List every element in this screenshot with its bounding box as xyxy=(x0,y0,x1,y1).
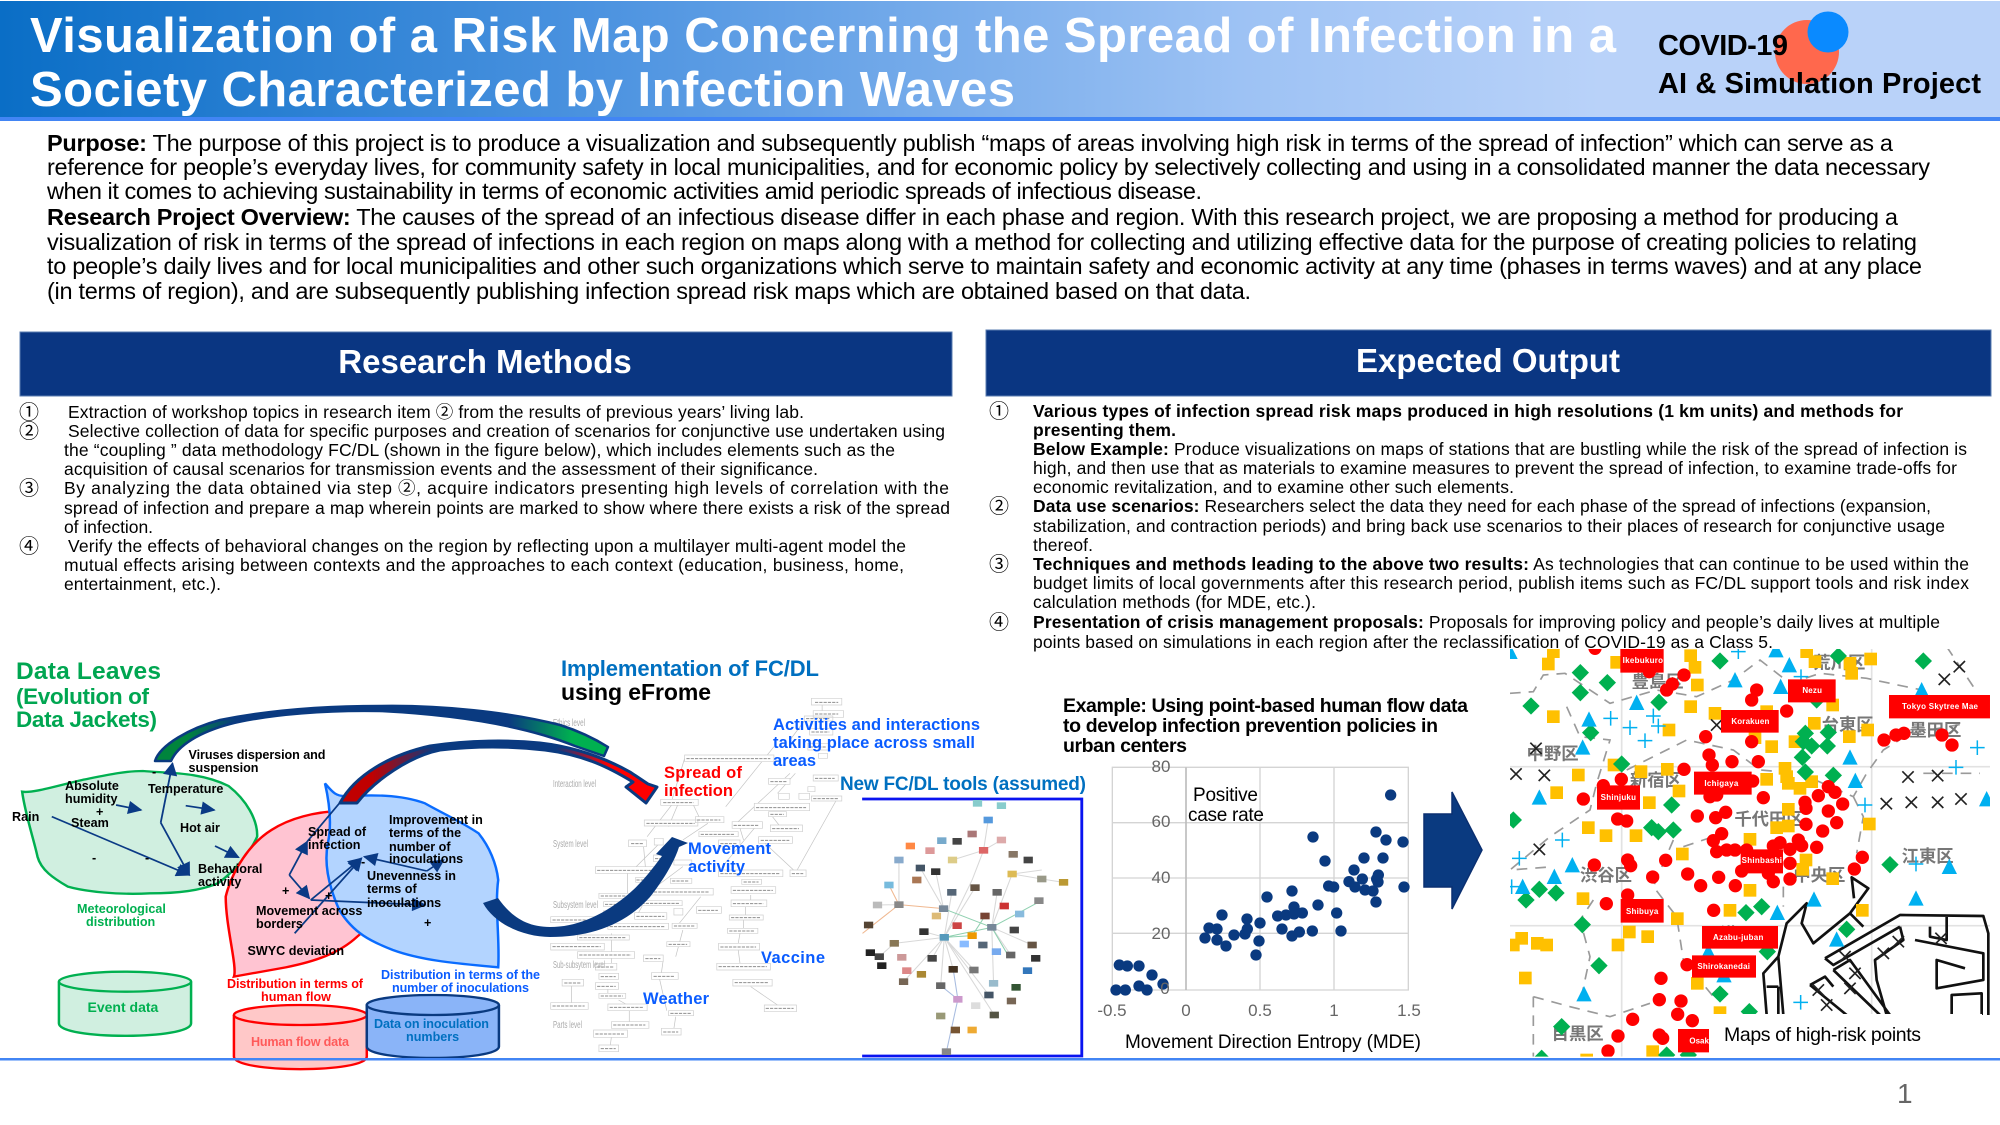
data leaves labels: Hot air xyxy=(180,821,220,835)
research methods list: By analyzing the data obtained via step ②, acquire indicators presenting high levels of correlation with the xyxy=(64,478,949,498)
expected output list: ④ xyxy=(989,606,1009,635)
map caption: Maps of high-risk points xyxy=(1724,1024,1921,1046)
ward names: 目黒区 xyxy=(1552,1019,1604,1044)
data leaves labels: suspension xyxy=(188,761,258,775)
leaf and cylinder captions: human flow xyxy=(261,990,331,1004)
axis tick labels: 80 xyxy=(1152,757,1170,776)
data leaves labels: number of xyxy=(389,840,451,854)
eFrome topic labels: areas xyxy=(773,752,816,770)
title xyxy=(30,9,1617,117)
data leaves labels: Rain xyxy=(12,810,39,824)
expected output list: calculation methods (for MDE, etc.). xyxy=(1033,592,1316,612)
data leaves labels: + xyxy=(424,916,431,930)
panel heading: research methods: Research Methods xyxy=(338,343,632,380)
title: Visualization of a Risk Map Concerning the Spread of Infection in a xyxy=(30,9,1617,63)
ward names: 墨田区 xyxy=(1909,716,1961,741)
data leaves heading: (Evolution of xyxy=(16,684,150,709)
eFrome topic labels: Weather xyxy=(643,990,710,1008)
leaf and cylinder captions: Data on inoculation xyxy=(374,1017,489,1031)
data leaves labels: + xyxy=(96,805,103,819)
data leaves labels: humidity xyxy=(65,792,117,806)
station labels: Shirokanedai xyxy=(1697,962,1750,971)
block arrow to map xyxy=(1424,792,1482,909)
eFrome topic labels: infection xyxy=(664,782,733,800)
research methods list: mutual effects arising between contexts and the approaches to each context (education, business, home, xyxy=(64,555,904,575)
data leaves labels: Steam xyxy=(71,816,109,830)
plus markers xyxy=(1504,644,1985,1010)
level labels: Interaction level xyxy=(553,778,596,790)
axis titles: Movement Direction Entropy (MDE) xyxy=(1125,1032,1421,1053)
risk map xyxy=(1502,642,1994,1067)
expected output list: ② xyxy=(989,490,1009,519)
purpose and overview text: visualization of risk in terms of the spread of infections in each region on maps along with a method for collecting and utilizing effective data for the purpose of creating policies to relating xyxy=(47,229,1917,255)
purpose and overview text: when it comes to achieving sustainability in terms of economic activities amid periodic spreads of infectious disease. xyxy=(46,178,1202,204)
level labels: System level xyxy=(553,838,588,850)
research methods list: ② xyxy=(19,415,39,444)
curved arrow: red into eFrome xyxy=(340,741,657,803)
station labels: Ikebukuro xyxy=(1623,656,1663,665)
data leaves heading: Data Leaves xyxy=(16,658,161,685)
research methods list: acquisition of causal scenarios for transmission events and the assessment of their significance. xyxy=(64,459,818,479)
axis tick labels: 60 xyxy=(1152,812,1170,831)
ward names: 新宿区 xyxy=(1630,766,1682,791)
research methods list xyxy=(19,396,950,594)
leaf and cylinder captions: Distribution in terms of xyxy=(227,977,364,991)
station labels: Nezu xyxy=(1802,686,1822,695)
level labels: Parts level xyxy=(553,1019,582,1031)
ward names: 港区 xyxy=(1720,920,1755,945)
ward names: 渋谷区 xyxy=(1580,861,1632,886)
implementation heading xyxy=(561,656,819,705)
leaf and cylinder captions: Distribution in terms of the xyxy=(381,968,540,982)
axis titles xyxy=(1125,785,1421,1053)
expected output list: budget limits of local governments after this research period, publish items such as FC/DL support tools and risk index xyxy=(1033,573,1969,593)
panel heading: research methods xyxy=(20,332,952,396)
ward names: 荒川区 xyxy=(1813,648,1865,673)
cylinder: human flow data xyxy=(234,1005,367,1069)
research methods list: ① xyxy=(19,396,39,425)
axis tick labels: 1.5 xyxy=(1397,1001,1421,1020)
ward boundaries xyxy=(1510,647,1980,1057)
ward names xyxy=(1527,648,1961,1044)
project logo: COVID-19 xyxy=(1658,30,1788,62)
axis titles: Positive xyxy=(1193,785,1258,806)
example heading: Example: Using point-based human flow data xyxy=(1063,695,1468,717)
station labels: Shinjuku xyxy=(1601,793,1636,802)
scatter chart xyxy=(1097,757,1421,1053)
data leaves labels: terms of xyxy=(367,882,417,896)
expected output list: economic revitalization, and to examine other such elements. xyxy=(1033,477,1514,497)
panel heading: expected output xyxy=(986,330,1991,396)
data leaves labels: Spread of xyxy=(308,825,367,839)
new FC/DL tools heading: New FC/DL tools (assumed) xyxy=(840,774,1086,795)
expected output list: ③ xyxy=(989,548,1009,577)
data leaves labels: activity xyxy=(198,875,241,889)
eFrome topic labels: Movement xyxy=(688,840,772,858)
expected output list xyxy=(989,395,1969,652)
leaf and cylinder captions: Meteorological xyxy=(77,902,166,916)
data leaves labels: - xyxy=(152,765,156,779)
leaf and cylinder captions xyxy=(77,902,540,1049)
ward names: 千代田区 xyxy=(1734,805,1804,830)
data points xyxy=(1110,789,1410,996)
research methods list: Extraction of workshop topics in research item ② from the results of previous years’ living lab. xyxy=(68,402,804,422)
purpose and overview text: Purpose: The purpose of this project is to produce a visualization and subsequently publish “maps of areas involving high risk in terms of the spread of infection” which can serve as a xyxy=(47,130,1894,156)
curved arrow: navy to movement activity xyxy=(483,837,688,937)
axis titles: case rate xyxy=(1188,805,1264,826)
ward names: 中央区 xyxy=(1793,861,1845,886)
implementation heading: Implementation of FC/DL xyxy=(561,656,819,681)
research methods list: ④ xyxy=(19,530,39,559)
expected output list: points based on simulations in each region after the reclassification of COVID-19 as a Class 5. xyxy=(1033,632,1773,652)
data leaves labels: inoculations xyxy=(389,852,463,866)
data leaves heading: Data Jackets) xyxy=(16,707,157,732)
data leaves labels: infection xyxy=(308,838,360,852)
data leaves labels: Viruses dispersion and xyxy=(188,748,326,762)
eFrome topic labels: activity xyxy=(688,858,746,876)
cylinder: event data xyxy=(59,972,191,1036)
expected output list: presenting them. xyxy=(1033,420,1176,440)
implementation heading: using eFrome xyxy=(561,679,711,705)
purpose and overview text: to people’s daily lives and for local municipalities and other such organizations which serve to maintain safety and economic activity at any time (phases in terms waves) and at any place xyxy=(47,253,1922,279)
research methods list: Verify the effects of behavioral changes on the region by reflecting upon a multilayer multi-agent model the xyxy=(68,536,906,556)
station labels: Azabu-juban xyxy=(1713,933,1763,942)
page number: 1 xyxy=(1897,1078,1913,1109)
axis tick labels: 1 xyxy=(1329,1001,1339,1020)
eFrome topic labels: Vaccine xyxy=(761,949,825,967)
ward names: 豊島区 xyxy=(1632,668,1684,693)
data leaves heading xyxy=(16,658,161,732)
level labels: Ethics level xyxy=(553,717,585,729)
data leaves labels: - xyxy=(145,851,149,865)
leaf and cylinder captions: Human flow data xyxy=(251,1035,350,1049)
bottom rule xyxy=(0,1058,2000,1060)
axis tick labels xyxy=(1097,757,1421,1020)
squares: orange points xyxy=(1507,645,1877,1066)
new FC/DL tools network box xyxy=(862,799,1082,1056)
expected output list: Techniques and methods leading to the above two results: As technologies that can continue to be used within the xyxy=(1033,554,1969,574)
red high-risk points xyxy=(1577,642,1959,1058)
diamonds: green points xyxy=(1505,647,1932,1067)
data leaves labels: inoculations xyxy=(367,896,441,910)
eFrome topic labels: Spread of xyxy=(664,764,742,782)
cylinder: inoculation data xyxy=(367,995,499,1058)
expected output list: Data use scenarios: Researchers select the data they need for each phase of the spread of infections (expansion, xyxy=(1033,496,1931,516)
research methods list: spread of infection and prepare a map wherein points are marked to show where there exists a risk of the spread xyxy=(64,498,950,518)
axis tick labels: 0.5 xyxy=(1248,1001,1272,1020)
header banner xyxy=(0,1,2000,121)
station labels: Shinbashi xyxy=(1742,856,1782,865)
research methods list: Selective collection of data for specific purposes and creation of scenarios for conjunctive use undertaken using xyxy=(68,421,945,441)
station labels: Ichigaya xyxy=(1704,779,1739,788)
axis tick labels: 20 xyxy=(1152,924,1170,943)
axis tick labels: 0 xyxy=(1181,1001,1191,1020)
expected output list: Presentation of crisis management proposals: Proposals for improving policy and people’s daily lives at multiple xyxy=(1033,612,1940,632)
eFrome tree graph xyxy=(551,698,844,1052)
project logo xyxy=(1658,12,1981,100)
data leaves labels: Temperature xyxy=(148,782,223,796)
data leaves labels: Improvement in xyxy=(389,813,483,827)
expected output list: Below Example: Produce visualizations on maps of stations that are bustling while the risk of the spread of infection is xyxy=(1033,439,1967,459)
station labels xyxy=(1597,649,1992,1052)
data leaves diagram shapes xyxy=(22,763,499,1069)
ward names: 台東区 xyxy=(1822,711,1874,736)
data leaves labels xyxy=(12,748,483,958)
leaf: inoculations xyxy=(325,783,499,967)
research methods list: entertainment, etc.). xyxy=(64,574,221,594)
coastline xyxy=(1763,877,1988,1015)
causal arrows xyxy=(52,763,444,933)
data leaves labels: Behavioral xyxy=(198,862,262,876)
station labels: Osak xyxy=(1689,1037,1710,1046)
axis tick labels: 0 xyxy=(1160,979,1170,998)
example heading: to develop infection prevention policies in xyxy=(1063,715,1438,737)
eFrome topic labels: taking place across small xyxy=(773,734,975,752)
axis tick labels: 40 xyxy=(1152,868,1170,887)
station labels: Shibuya xyxy=(1626,907,1659,916)
leaf and cylinder captions: distribution xyxy=(86,915,155,929)
data leaves labels: Absolute xyxy=(65,779,119,793)
eFrome topic labels: Activities and interactions xyxy=(773,716,980,734)
data leaves labels: borders xyxy=(256,917,303,931)
curved arrow: green into eFrome xyxy=(155,706,608,761)
map caption xyxy=(1709,1014,1982,1057)
research methods list: the “coupling ” data methodology FC/DL (shown in the figure below), which includes elements such as the xyxy=(64,440,895,460)
expected output list: Various types of infection spread risk maps produced in high resolutions (1 km units) and methods for xyxy=(1033,401,1903,421)
level labels: Sub-subsytem level xyxy=(553,959,605,971)
expected output list: stabilization, and contraction periods) and bring back use scenarios to their places of research for conjunctive usage xyxy=(1033,516,1945,536)
data leaves labels: - xyxy=(361,855,365,869)
example heading: urban centers xyxy=(1063,735,1187,757)
ward names: 中野区 xyxy=(1527,739,1579,764)
eFrome topic labels xyxy=(643,716,980,1008)
data leaves labels: Movement across xyxy=(256,904,362,918)
project logo: AI & Simulation Project xyxy=(1658,68,1981,100)
expected output list: thereof. xyxy=(1033,535,1093,555)
example heading xyxy=(1063,695,1468,757)
data leaves labels: - xyxy=(92,851,96,865)
panel heading: expected output: Expected Output xyxy=(1356,342,1620,379)
cross markers xyxy=(1510,661,1967,1011)
title: Society Characterized by Infection Waves xyxy=(30,63,1015,117)
leaf and cylinder captions: number of inoculations xyxy=(392,981,529,995)
purpose and overview text: reference for people’s everyday lives, for community safety in local municipalities, and for economic policy by selectively collecting and using in a consolidated manner the data necessary xyxy=(47,154,1930,180)
data leaves labels: + xyxy=(325,889,332,903)
level labels: Subsystem level xyxy=(553,899,598,911)
purpose and overview text: (in terms of region), and are subsequently publishing infection spread risk maps which are obtained based on that data. xyxy=(47,278,1251,304)
expected output list: ① xyxy=(989,395,1009,424)
level labels xyxy=(553,717,605,1031)
leaf: human flow xyxy=(226,811,393,977)
station labels: Tokyo Skytree Mae xyxy=(1902,702,1979,711)
expected output list: high, and then use that as materials to examine measures to prevent the spread of infection, to examine trade-offs for xyxy=(1033,458,1957,478)
axis tick labels: -0.5 xyxy=(1097,1001,1127,1020)
triangles: blue points xyxy=(1502,642,1994,1001)
leaf: meteorological distribution xyxy=(22,771,257,894)
station labels: Korakuen xyxy=(1731,717,1769,726)
purpose and overview text: Research Project Overview: The causes of the spread of an infectious disease differ in each phase and region. With this research project, we are proposing a method for producing a xyxy=(47,204,1899,230)
data leaves labels: SWYC deviation xyxy=(248,944,344,958)
research methods list: of infection. xyxy=(64,517,153,537)
leaf and cylinder captions: numbers xyxy=(406,1030,459,1044)
ward names: 江東区 xyxy=(1902,842,1954,867)
purpose and overview text xyxy=(46,130,1930,304)
research methods list: ③ xyxy=(19,472,39,501)
data leaves labels: Unevenness in xyxy=(367,869,456,883)
data leaves labels: terms of the xyxy=(389,826,461,840)
data leaves labels: + xyxy=(282,884,289,898)
leaf and cylinder captions: Event data xyxy=(88,999,159,1015)
